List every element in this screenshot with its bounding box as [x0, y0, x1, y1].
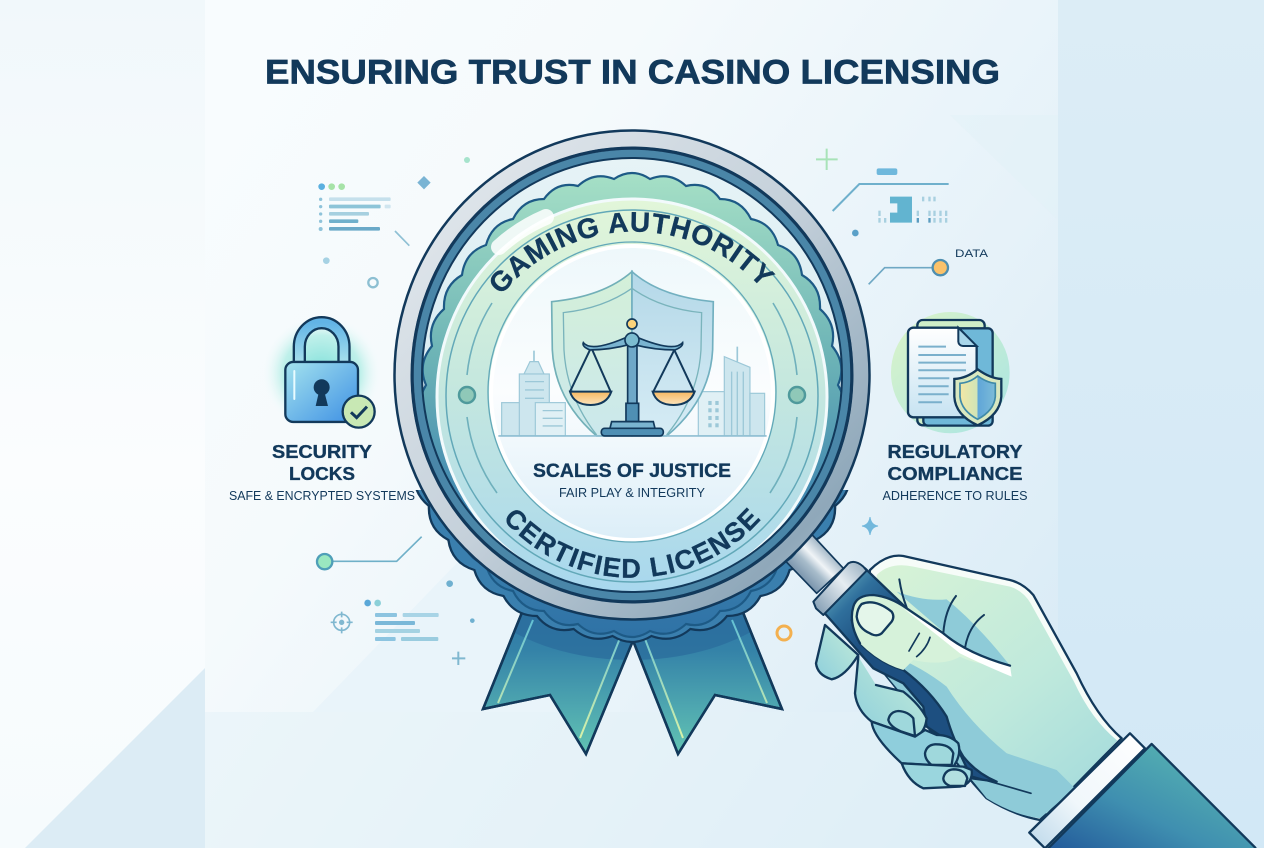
illustration: shield, city and scales — [498, 272, 767, 436]
index finger — [816, 625, 858, 679]
decorations: upper right data — [816, 149, 949, 284]
label: security locks: SECURITY — [272, 441, 373, 462]
decorations: dot near top of lens — [464, 157, 470, 163]
badge ring — [437, 199, 827, 595]
magnifying lens and seal — [393, 129, 871, 638]
little finger — [902, 763, 972, 788]
thumb — [852, 595, 1010, 670]
label: regulatory compliance — [882, 441, 1028, 503]
text: scales of justice: SCALES OF JUSTICE — [533, 460, 731, 482]
magnifier handle and hand — [772, 520, 1257, 848]
scalloped seal — [420, 173, 844, 637]
decorations: lower left data — [317, 537, 475, 665]
icon: compliance document — [891, 312, 1010, 433]
lens glare — [499, 217, 546, 247]
collar — [813, 562, 867, 615]
text: certified license: CERTIFIED LICENSE — [506, 507, 761, 578]
label: data: DATA — [955, 248, 989, 260]
icon: security lock — [262, 315, 382, 432]
decorations: sparkle and orange ring — [777, 517, 878, 640]
label: regulatory compliance: REGULATORY — [888, 441, 1023, 462]
title: ENSURING TRUST IN CASINO LICENSING — [265, 54, 1000, 92]
ribbons — [481, 613, 784, 757]
palm shadow — [897, 592, 1010, 666]
label: security locks: SAFE & ENCRYPTED SYSTEMS — [229, 489, 415, 503]
tube — [823, 568, 997, 782]
ring finger — [872, 722, 959, 767]
lens rim — [394, 130, 870, 620]
decorations: upper left data — [318, 176, 431, 287]
seal lower flare — [416, 490, 848, 643]
inner disc — [491, 246, 773, 540]
text: gaming authority: GAMING AUTHORITY — [490, 212, 776, 292]
label: regulatory compliance: COMPLIANCE — [888, 463, 1022, 484]
lens backdrop — [420, 156, 844, 594]
label: security locks: LOCKS — [289, 463, 355, 484]
cuff — [1029, 733, 1145, 848]
text: fair play and integrity: FAIR PLAY & INTEGRITY — [559, 486, 706, 500]
handle neck — [772, 520, 843, 593]
label: regulatory compliance: ADHERENCE TO RULES — [882, 489, 1028, 503]
hand back — [860, 556, 1122, 820]
label: security locks — [229, 441, 415, 503]
sleeve — [1047, 744, 1257, 848]
thumbnail — [857, 602, 893, 635]
middle finger — [855, 657, 927, 737]
